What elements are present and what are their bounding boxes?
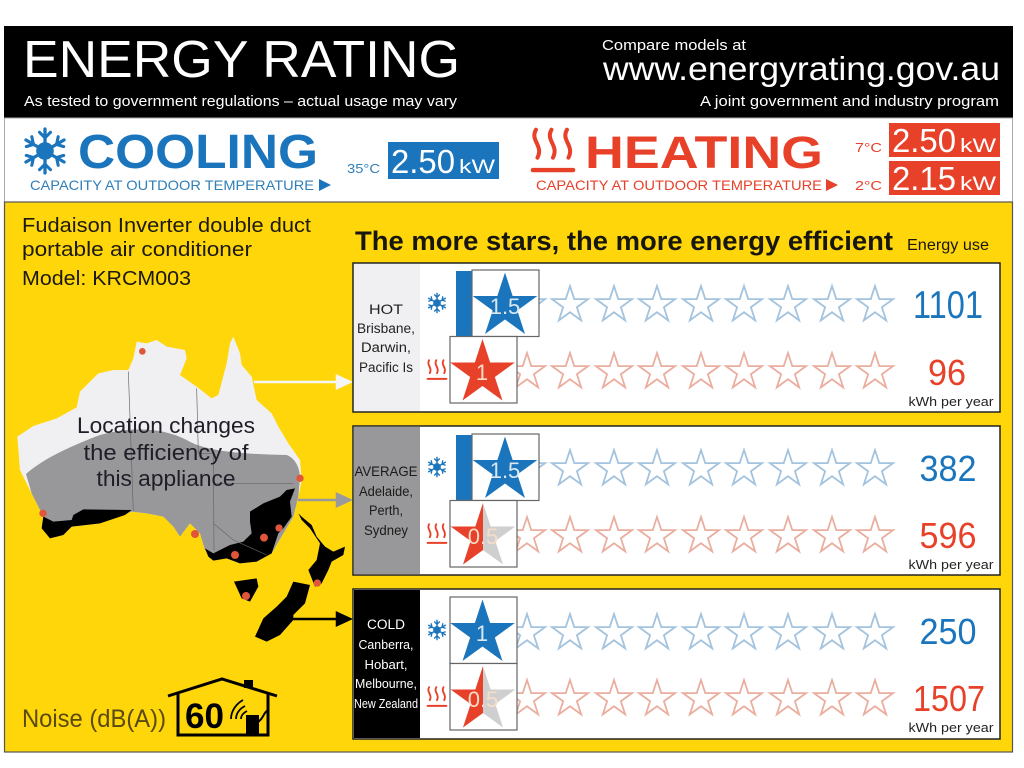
heating 2 degree value: kW	[960, 174, 996, 195]
heating caption arrow	[826, 179, 838, 191]
location label: hot: HOT	[369, 301, 404, 317]
icon: snowflake	[429, 620, 445, 640]
subtitle: As tested to government regulations – actual usage may vary	[24, 94, 458, 110]
heating capacity caption: CAPACITY AT OUTDOOR TEMPERATURE	[536, 177, 822, 193]
panel: hot climate	[353, 263, 1000, 412]
icon: snowflake	[429, 293, 445, 313]
cooling heading: COOLING	[78, 126, 318, 179]
location label: average: Adelaide,	[359, 484, 413, 499]
unit label: kWh per year	[908, 720, 994, 735]
energy use heading: Energy use	[907, 237, 989, 254]
cooling capacity value	[388, 142, 499, 180]
heating rating star 1: 1	[476, 360, 488, 385]
heating outline stars	[509, 353, 893, 387]
cooling energy value: 250	[920, 611, 976, 652]
cooling rating star 1: 1	[476, 621, 488, 646]
cooling energy value: 1101	[913, 284, 983, 327]
location label: cold: New Zealand	[354, 696, 418, 711]
location label: cold: COLD	[367, 617, 405, 632]
heating rating star 0.5	[450, 500, 517, 567]
compare models label: Compare models at	[602, 38, 746, 54]
location label: average: Sydney	[364, 523, 408, 538]
cooling rating star 1.5: 1.5	[490, 294, 520, 319]
cooling rating star 1.5: 1.5	[490, 458, 520, 483]
map caption: Location changes	[77, 413, 255, 438]
map caption: this appliance	[96, 466, 236, 491]
cooling capacity value: 2.50	[391, 143, 455, 180]
cooling caption arrow	[319, 179, 331, 191]
product description	[22, 215, 311, 290]
location label: cold: Hobart,	[364, 657, 408, 672]
cooling energy value: 382	[920, 448, 976, 489]
noise label: Noise (dB(A))	[22, 705, 166, 733]
efficiency heading: The more stars, the more energy efficient	[355, 226, 893, 256]
product description: Fudaison Inverter double duct	[22, 215, 311, 237]
heating outline stars	[509, 680, 893, 714]
location label: hot: Pacific Is	[359, 360, 413, 375]
heating energy value: 1507	[913, 678, 985, 719]
icon: cooling snowflake	[26, 129, 64, 173]
unit label: kWh per year	[908, 394, 994, 409]
heating energy value: 596	[920, 515, 976, 556]
icon: noise house	[168, 679, 277, 736]
icon: sound waves and appliance	[231, 700, 268, 734]
map: average zone	[26, 429, 300, 563]
icon: snowflake	[429, 457, 445, 477]
map: cold zone mainland	[42, 509, 132, 538]
heating 7 degree value: kW	[960, 136, 996, 157]
heating heading: HEATING	[585, 127, 823, 178]
title: ENERGY RATING	[23, 31, 460, 89]
program note: A joint government and industry program	[700, 94, 999, 110]
location label: hot: Darwin,	[361, 340, 411, 355]
map caption	[77, 413, 255, 491]
map: New Zealand north island	[298, 513, 345, 587]
cooling rating star 1.5	[456, 434, 539, 500]
heating energy value: 96	[928, 352, 966, 393]
heating outline stars	[509, 517, 893, 551]
map caption: the efficiency of	[84, 440, 249, 465]
cooling rating star 1.5	[456, 270, 539, 336]
header band	[4, 26, 1013, 118]
location label: average	[354, 427, 420, 574]
location label: hot: Brisbane,	[357, 321, 415, 336]
arrow: hot zone	[254, 376, 350, 388]
product description: portable air conditioner	[22, 239, 252, 261]
heating 7 degree label: 7°C	[855, 140, 882, 155]
heating rating star 1	[450, 336, 517, 403]
heating 2 degree label: 2°C	[855, 178, 882, 193]
cooling capacity caption: CAPACITY AT OUTDOOR TEMPERATURE	[30, 177, 314, 193]
panel: cold climate	[353, 589, 1000, 739]
noise value: 60	[185, 697, 224, 736]
location label: hot	[354, 264, 420, 411]
heating rating star 0.5: 0.5	[468, 524, 498, 549]
cooling rating star 1	[450, 597, 517, 664]
location label: cold	[354, 590, 420, 738]
location label: average: Perth,	[369, 503, 403, 518]
arrow: average zone	[298, 494, 350, 506]
location label: average: AVERAGE	[354, 463, 418, 479]
icon: heating waves	[533, 130, 573, 170]
map: hot zone	[17, 337, 302, 563]
yellow main panel	[4, 202, 1012, 752]
heating 2 degree value	[889, 160, 1000, 197]
icon: heat	[428, 360, 446, 379]
unit label: kWh per year	[908, 557, 994, 572]
map: Australia and New Zealand climate zones	[17, 337, 345, 642]
map: state borders	[128, 372, 293, 555]
cooling temperature: 35°C	[347, 161, 380, 176]
map: cold zone southeast	[205, 488, 295, 563]
heating rating star 0.5: 0.5	[468, 687, 498, 712]
location label: cold: Canberra,	[358, 637, 414, 652]
product description: Model: KRCM003	[22, 268, 191, 290]
map: Tasmania	[234, 578, 258, 602]
heating 7 degree value	[889, 122, 1000, 159]
cooling outline stars	[509, 614, 893, 648]
icon: heat	[428, 687, 446, 706]
heating 7 degree value: 2.50	[892, 122, 956, 159]
map: city markers	[39, 348, 321, 600]
cooling outline stars	[509, 286, 893, 320]
arrow: cold zone	[288, 613, 350, 625]
heating rating star 0.5	[450, 664, 517, 730]
heating 2 degree value: 2.15	[892, 160, 956, 197]
cooling capacity value: kW	[459, 157, 495, 178]
cooling outline stars	[509, 450, 893, 484]
capacity band	[4, 118, 1012, 202]
location label: cold: Melbourne,	[355, 676, 417, 691]
website url: www.energyrating.gov.au	[602, 50, 1000, 87]
map: New Zealand south island	[255, 582, 310, 642]
icon: heat	[428, 524, 446, 543]
panel: average climate	[353, 426, 1000, 575]
